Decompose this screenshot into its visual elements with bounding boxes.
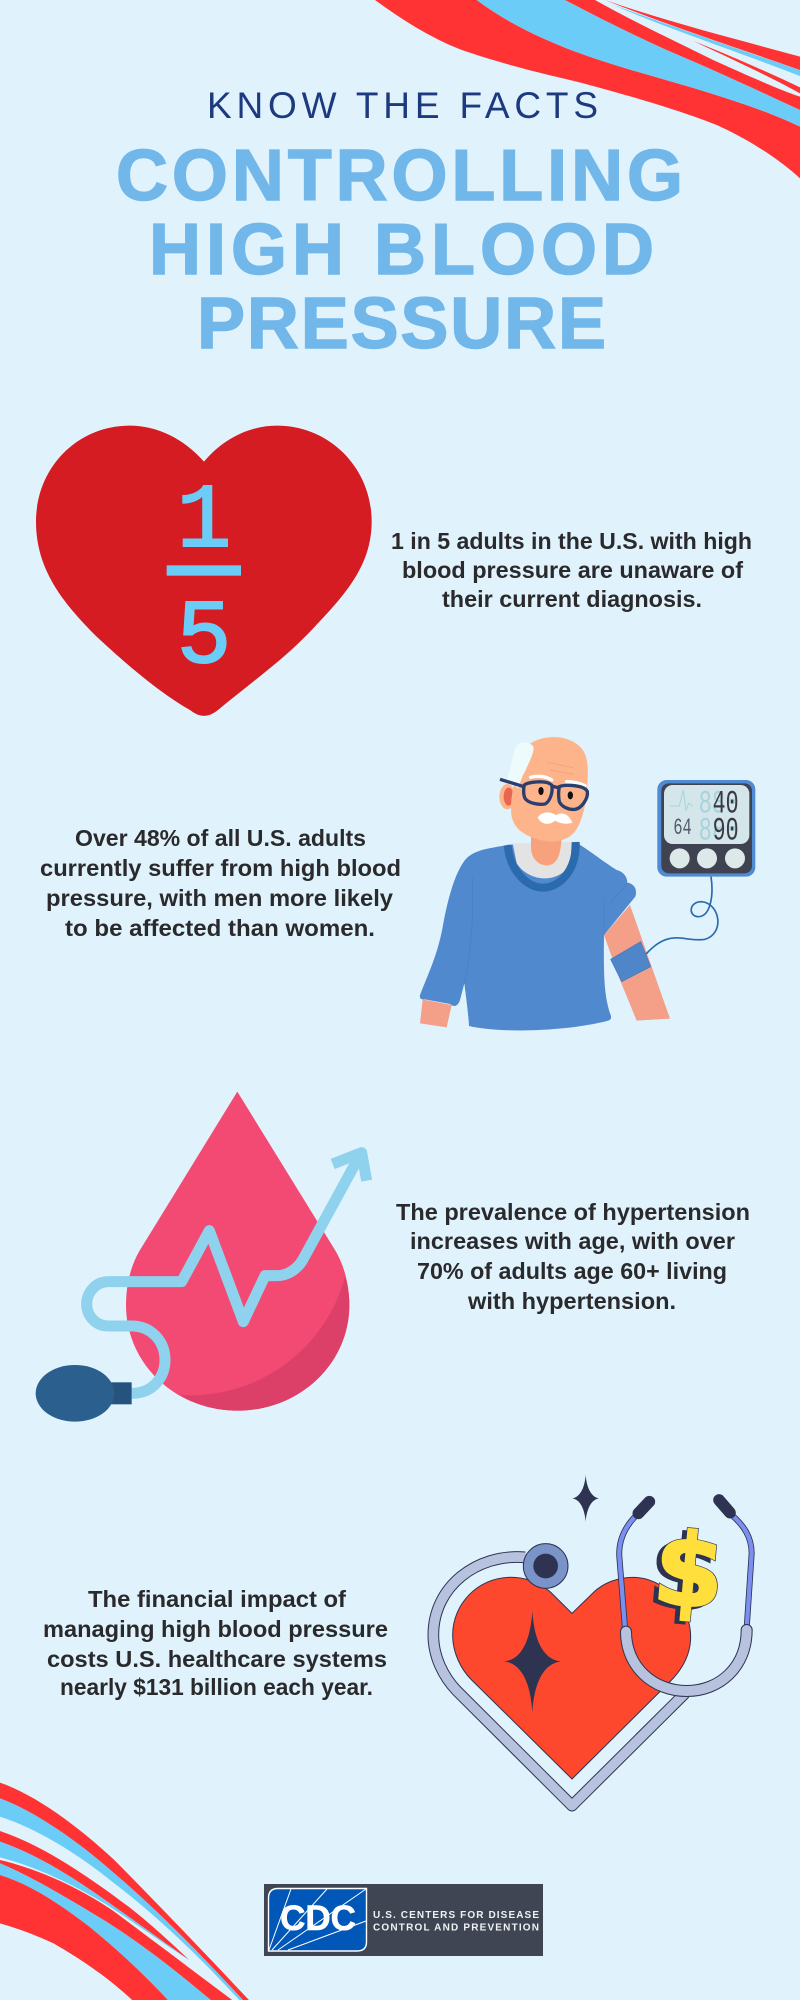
text: financial impact xyxy=(43,1586,388,1700)
forehead wrinkles xyxy=(547,762,574,774)
CDC wordmark xyxy=(373,1910,539,1934)
icon: red heart with one in five fraction xyxy=(36,426,372,716)
blood pressure cuff xyxy=(611,942,651,982)
text: prevalence of hypertension: The prevalence of hypertension xyxy=(396,1199,750,1225)
decorative swoosh: bottom left xyxy=(0,1783,249,2000)
text: financial impact: The financial impact of xyxy=(88,1586,346,1612)
text: financial impact: managing high blood pressure xyxy=(43,1616,388,1642)
text: one in five adults xyxy=(391,528,752,612)
CDC blue badge xyxy=(268,1888,366,1951)
illustration: heart with stethoscope and dollar sign xyxy=(433,1475,752,1806)
illustration: older man with blood pressure monitor xyxy=(420,737,755,1030)
right arm xyxy=(604,905,670,1021)
stethoscope outer tube xyxy=(433,1557,685,1806)
text: financial impact: nearly $131 billion each year. xyxy=(60,1674,373,1700)
heart xyxy=(453,1577,691,1779)
bulb xyxy=(36,1365,114,1422)
text: 48 percent of adults: to be affected than women. xyxy=(65,915,375,941)
CDC logo xyxy=(264,1884,543,1956)
text: 48 percent of adults: Over 48% of all U.S. adults xyxy=(75,825,366,851)
text: 48 percent of adults: pressure, with men more likely xyxy=(46,885,393,911)
text: prevalence of hypertension xyxy=(396,1199,750,1314)
stethoscope Y tube xyxy=(626,1630,747,1691)
dollar sign: $ xyxy=(649,1510,729,1632)
drop shadow area xyxy=(180,1277,349,1411)
shirt fold lines xyxy=(464,877,627,983)
moustache xyxy=(538,812,572,824)
icon: red heart with one in five fraction: 5 xyxy=(177,587,231,690)
monitor xyxy=(657,780,755,877)
monitor: 888 xyxy=(699,785,739,822)
text: 48 percent of adults xyxy=(40,825,401,941)
monitor: 40 xyxy=(713,785,739,822)
chest piece xyxy=(523,1544,568,1588)
glasses xyxy=(500,779,587,809)
head xyxy=(511,737,588,842)
blue shirt xyxy=(420,843,636,1030)
title: HIGH BLOOD xyxy=(149,210,654,290)
monitor: 90 xyxy=(713,812,739,849)
title: PRESSURE xyxy=(197,284,606,364)
dollar sign: $ xyxy=(644,1512,724,1635)
small sparkle xyxy=(572,1475,599,1522)
white hair xyxy=(507,742,534,788)
icon: red heart with one in five fraction: 1 xyxy=(177,471,231,574)
blood drop xyxy=(126,1092,349,1411)
monitor: 64 xyxy=(673,815,692,841)
text: one in five adults: blood pressure are unaware of xyxy=(402,557,743,583)
pulse line and arrow xyxy=(87,1153,367,1393)
stethoscope ear tubes xyxy=(619,1500,752,1628)
connector xyxy=(110,1382,132,1404)
ear xyxy=(499,784,515,809)
CDC wordmark: CONTROL AND PREVENTION xyxy=(373,1922,539,1934)
dollar sign: $ xyxy=(649,1510,729,1632)
CDC blue badge: CDC xyxy=(280,1899,356,1938)
text: prevalence of hypertension: with hypertension. xyxy=(467,1288,676,1314)
subtitle: KNOW THE FACTS xyxy=(207,85,598,126)
text: financial impact: costs U.S. healthcare systems xyxy=(47,1646,387,1672)
text: one in five adults: 1 in 5 adults in the U.S. with high xyxy=(391,528,752,554)
text: prevalence of hypertension: 70% of adults age 60+ living xyxy=(417,1258,727,1284)
text: prevalence of hypertension: increases with age, with over xyxy=(410,1228,735,1254)
title xyxy=(116,136,683,364)
text: one in five adults: their current diagnosis. xyxy=(442,586,702,612)
title: CONTROLLING xyxy=(116,136,683,216)
neck xyxy=(531,830,562,865)
inner shirt collar xyxy=(513,842,572,878)
eyes xyxy=(538,787,544,795)
left hand xyxy=(420,999,452,1027)
large sparkle xyxy=(504,1611,561,1712)
monitor: 888 xyxy=(699,812,739,849)
CDC wordmark: U.S. CENTERS FOR DISEASE xyxy=(373,1910,539,1921)
illustration: blood drop with rising pressure arrow xyxy=(36,1092,367,1422)
decorative swoosh: top right xyxy=(375,0,800,178)
text: 48 percent of adults: currently suffer from high blood xyxy=(40,855,401,881)
eyebrows xyxy=(531,776,585,786)
tube xyxy=(646,877,718,954)
